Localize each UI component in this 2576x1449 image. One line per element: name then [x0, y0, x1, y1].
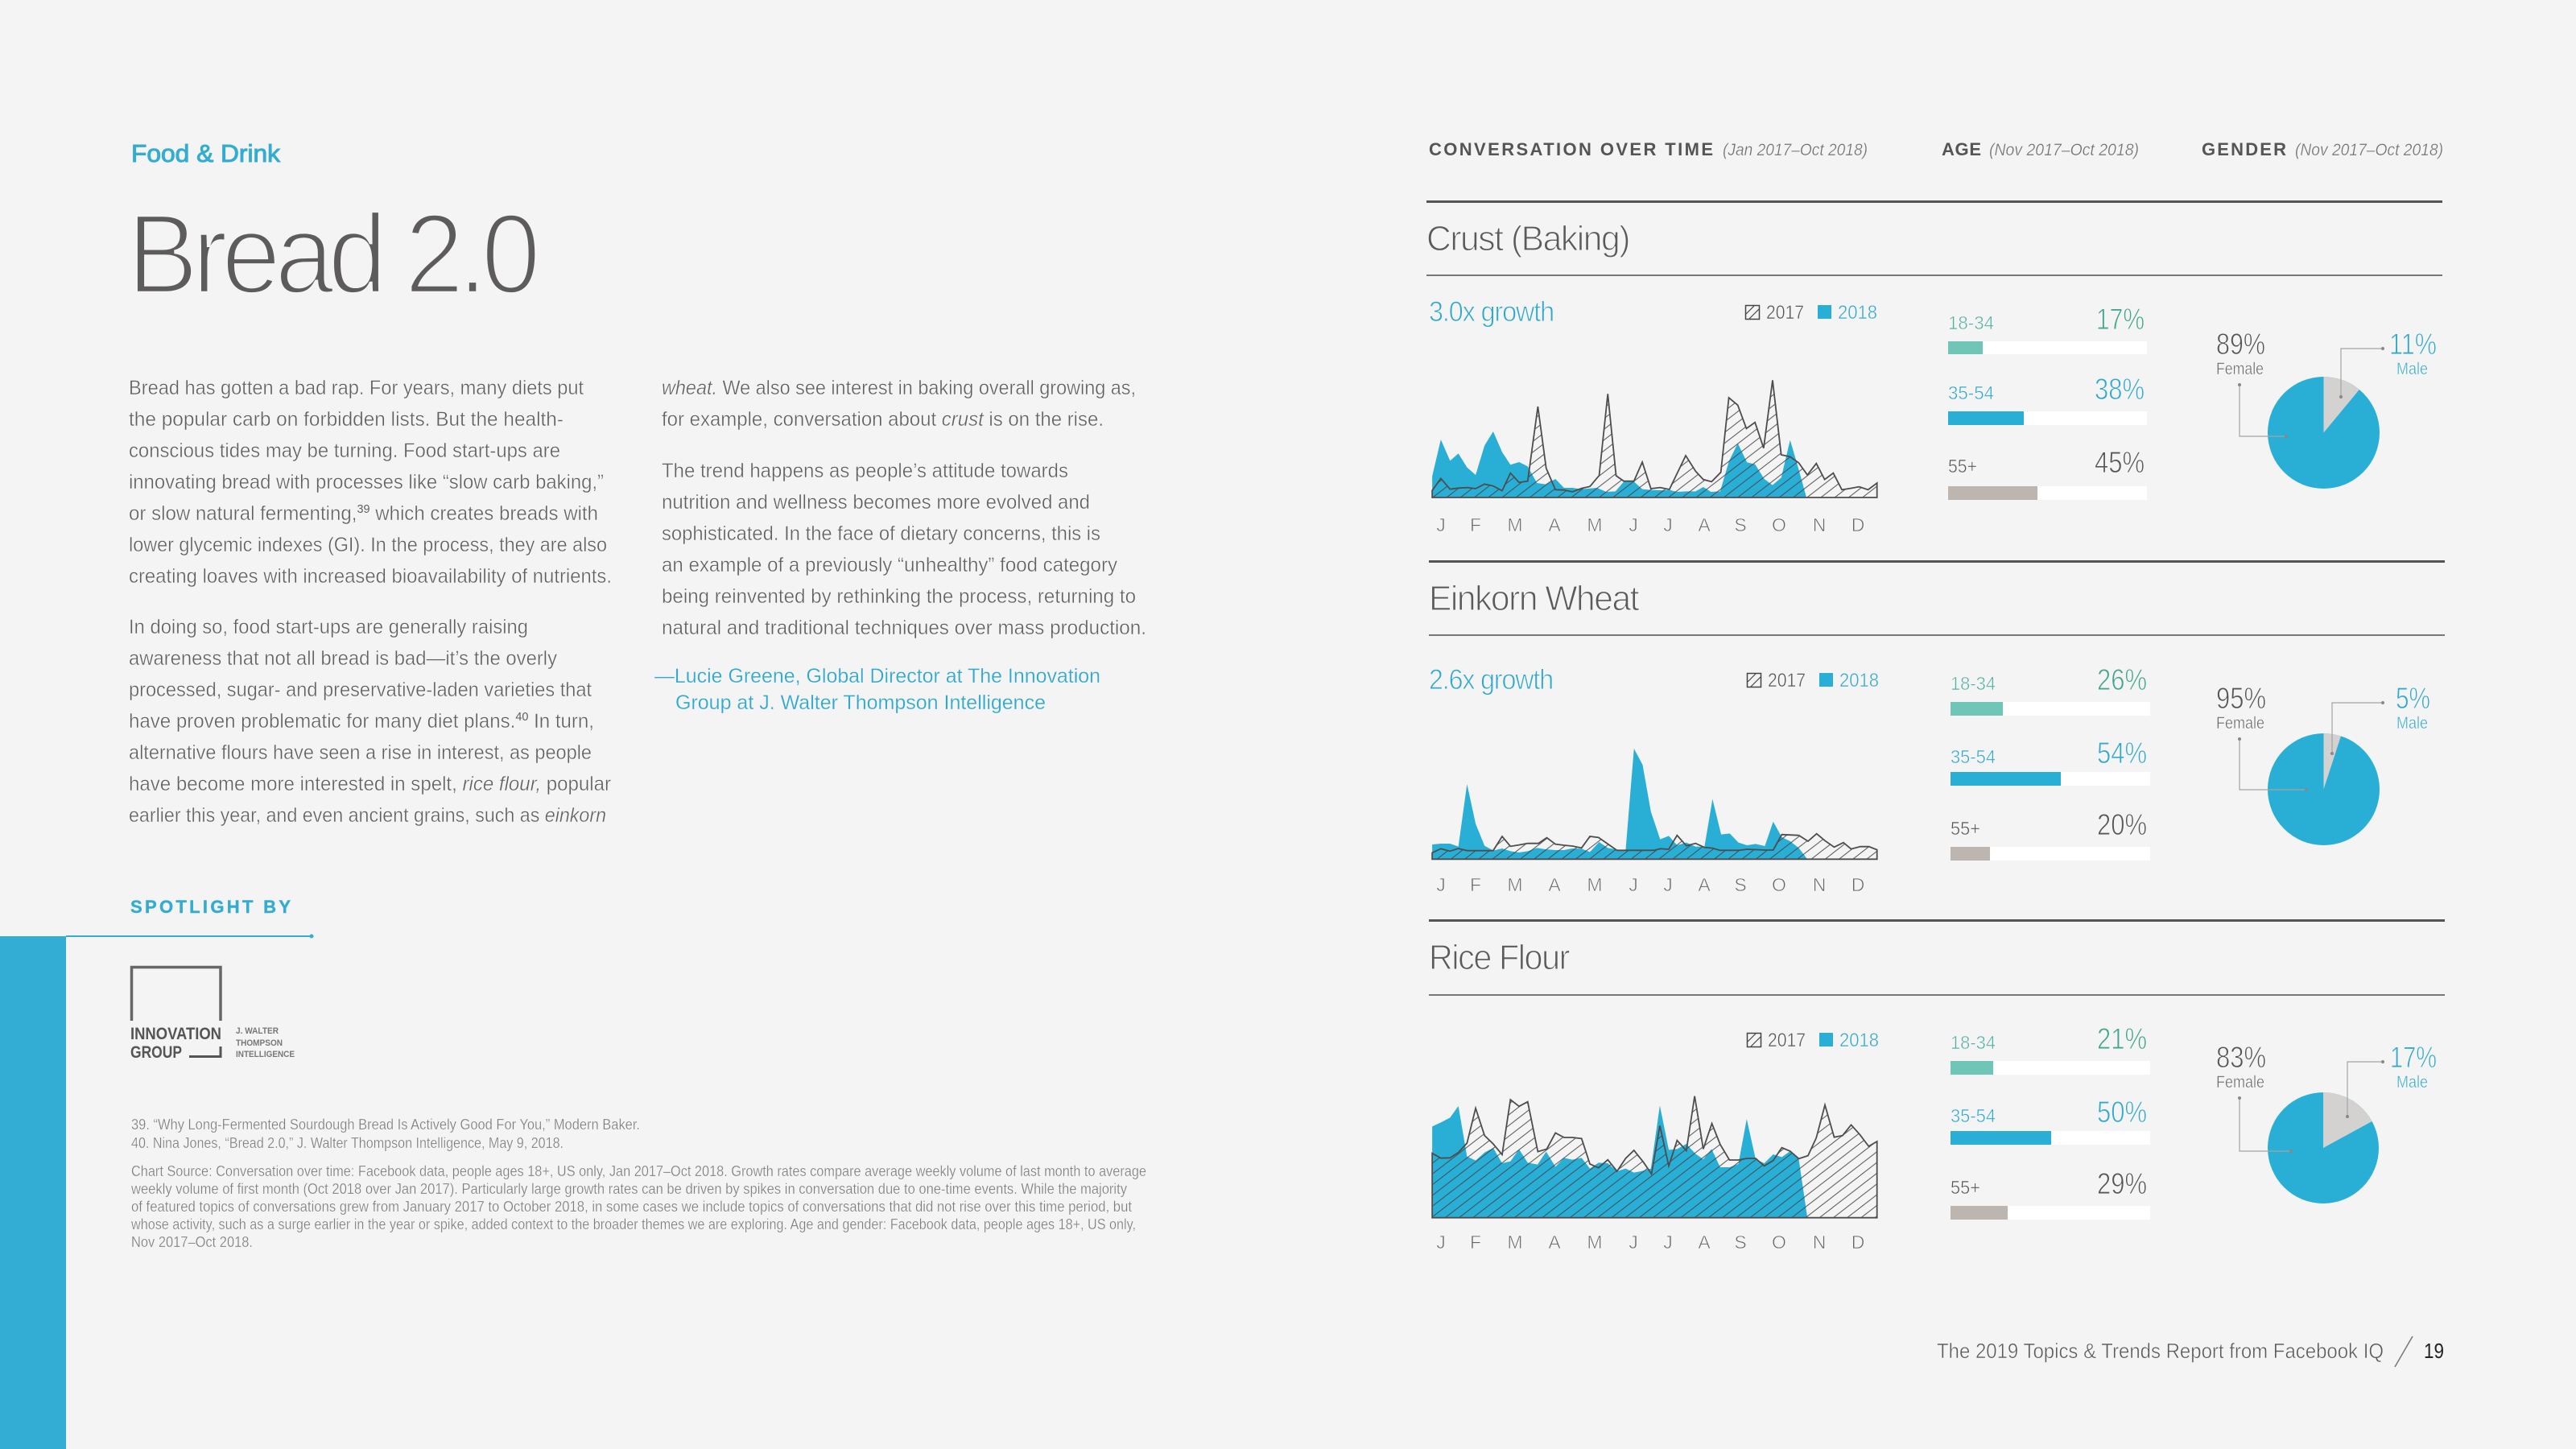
month axis: A	[1698, 514, 1711, 535]
heading: Einkorn Wheat	[1429, 579, 1639, 618]
gender pie: Male	[2396, 360, 2428, 378]
chart source note: Nov 2017–Oct 2018.	[131, 1234, 253, 1250]
gender pie	[2216, 1041, 2437, 1203]
month axis: D	[1852, 1232, 1864, 1253]
age bars: 18-34	[1951, 1032, 1996, 1053]
panel: Crust (Baking)	[1426, 200, 2442, 535]
month axis: O	[1772, 514, 1786, 535]
body text column 1: 39	[357, 502, 370, 516]
month axis: F	[1470, 514, 1481, 535]
legend: 2017	[1768, 1030, 1806, 1051]
body text column 1: the popular carb on forbidden lists. But the health-	[129, 408, 564, 431]
month axis	[1436, 1232, 1864, 1253]
column headers: (Nov 2017–Oct 2018)	[1989, 141, 2139, 159]
body text column 1	[129, 377, 612, 827]
month axis: J	[1663, 514, 1673, 535]
month axis: F	[1470, 874, 1481, 895]
month axis	[1436, 874, 1864, 895]
month axis: J	[1436, 874, 1446, 895]
logo: Innovation Group: THOMPSON	[236, 1038, 283, 1048]
age bars: 50%	[2097, 1096, 2147, 1129]
body text column 1: have become more interested in spelt, rice flour, popular	[129, 773, 611, 795]
body text column 2: nutrition and wellness becomes more evolved and	[662, 491, 1090, 514]
gender pie: 17%	[2390, 1041, 2437, 1074]
body text column 1: creating loaves with increased bioavailability of nutrients.	[129, 565, 612, 588]
gender pie: Female	[2216, 714, 2264, 733]
logo: Innovation Group: INNOVATION	[130, 1025, 221, 1043]
age bars: 55+	[1948, 456, 1977, 477]
gender pie: 83%	[2216, 1041, 2266, 1074]
legend: 2018	[1838, 302, 1877, 324]
age bars: 18-34	[1948, 312, 1994, 333]
month axis: A	[1698, 1232, 1711, 1253]
body text column 2: for example, conversation about crust is on the rise.	[662, 408, 1104, 431]
category label: Food & Drink	[131, 139, 281, 167]
month axis: N	[1813, 874, 1826, 895]
footnotes: 39. “Why Long-Fermented Sourdough Bread Is Actively Good For You,” Modern Baker.	[131, 1117, 640, 1133]
area chart	[1432, 749, 1877, 859]
footer: The 2019 Topics & Trends Report from Facebook IQ	[1937, 1339, 2384, 1363]
body text column 1: awareness that not all bread is bad—it’s the overly	[129, 647, 557, 670]
chart source note: whose activity, such as a surge earlier in the year or spike, added context to the broader themes we are exploring. Age and gender: Facebook data, people ages 18+, US only,	[130, 1216, 1136, 1232]
month axis: M	[1507, 1232, 1523, 1253]
body text column 1: innovating bread with processes like “slow carb baking,”	[129, 471, 604, 493]
growth label: 3.0x growth	[1429, 296, 1554, 328]
month axis: M	[1587, 874, 1603, 895]
age bars: 21%	[2097, 1022, 2147, 1055]
month axis: S	[1734, 514, 1747, 535]
legend: 2018	[1839, 1030, 1879, 1051]
gender pie: Female	[2216, 360, 2264, 378]
month axis: M	[1507, 514, 1523, 535]
month axis: A	[1548, 514, 1561, 535]
footnotes: 40. Nina Jones, “Bread 2.0,” J. Walter Thompson Intelligence, May 9, 2018.	[131, 1135, 564, 1151]
column headers: AGE	[1942, 139, 1981, 159]
logo: Innovation Group: INTELLIGENCE	[236, 1050, 295, 1059]
age bars: 45%	[2095, 446, 2145, 479]
body text column 1: have proven problematic for many diet plans.	[129, 710, 530, 733]
age bars: 29%	[2097, 1167, 2147, 1200]
body text column 2	[662, 377, 1146, 639]
area chart	[1432, 380, 1877, 497]
gender pie: 5%	[2396, 682, 2430, 715]
attribution quote: —Lucie Greene, Global Director at The Innovation	[654, 665, 1100, 687]
month axis: M	[1507, 874, 1523, 895]
gender pie: Female	[2216, 1073, 2264, 1092]
chart source note	[130, 1163, 1146, 1250]
area chart	[1432, 1096, 1877, 1218]
month axis: N	[1813, 1232, 1826, 1253]
spotlight rule with end dot	[66, 934, 314, 939]
age bars: 18-34	[1951, 673, 1996, 694]
attribution quote	[654, 665, 1100, 714]
legend	[1745, 302, 1877, 324]
heading: Crust (Baking)	[1426, 219, 1629, 258]
logo: Innovation Group: GROUP	[130, 1043, 182, 1062]
body text column 1: which creates breads with	[370, 502, 598, 525]
growth label: 2.6x growth	[1429, 664, 1553, 696]
legend: 2018	[1839, 670, 1879, 691]
body text column 2: natural and traditional techniques over mass production.	[662, 617, 1146, 639]
age bars: 55+	[1951, 818, 1980, 839]
column headers	[1429, 139, 2443, 159]
legend	[1747, 670, 1879, 691]
month axis: N	[1813, 514, 1826, 535]
body text column 1: alternative flours have seen a rise in interest, as people	[129, 741, 592, 764]
body text column 1: In doing so, food start-ups are generally raising	[129, 616, 528, 638]
body text column 2: wheat. We also see interest in baking overall growing as,	[662, 377, 1136, 399]
column headers: CONVERSATION OVER TIME	[1429, 139, 1713, 159]
body text column 1: or slow natural fermenting,	[129, 502, 366, 525]
footer: 19	[2424, 1339, 2444, 1363]
age bars: 26%	[2097, 663, 2147, 696]
logo: Innovation Group: J. WALTER	[236, 1026, 279, 1036]
body text column 1: In turn,	[528, 710, 594, 733]
spotlight heading: SPOTLIGHT BY	[130, 897, 291, 917]
age bars: 17%	[2096, 303, 2145, 336]
month axis: J	[1629, 514, 1638, 535]
age bars	[1951, 663, 2150, 861]
age bars: 38%	[2095, 373, 2145, 406]
gender pie: 11%	[2389, 328, 2437, 361]
month axis: D	[1852, 874, 1864, 895]
body text column 2: an example of a previously “unhealthy” food category	[662, 554, 1117, 576]
body text column 2: being reinvented by rethinking the process, returning to	[662, 585, 1136, 608]
legend	[1747, 1030, 1879, 1051]
month axis: M	[1587, 1232, 1603, 1253]
body text column 1: conscious tides may be turning. Food start-ups are	[129, 440, 560, 462]
month axis: O	[1772, 874, 1786, 895]
age bars	[1951, 1022, 2150, 1220]
chart source note: weekly volume of first month (Oct 2018 over Jan 2017). Particularly large growth rates can be driven by spikes in conversation due to one-time events. While the majority	[130, 1181, 1127, 1197]
body text column 1: 40	[515, 710, 528, 724]
chart source note: Chart Source: Conversation over time: Facebook data, people ages 18+, US only, Jan 2017–Oct 2018. Growth rates compare average weekly volume of last month to average	[131, 1163, 1146, 1179]
legend: 2017	[1768, 670, 1806, 691]
panel: Rice Flour	[1429, 919, 2445, 1253]
logo: Innovation Group	[130, 968, 295, 1062]
gender pie: Male	[2396, 714, 2428, 733]
gender pie: 89%	[2216, 328, 2265, 361]
gender pie	[2216, 328, 2437, 489]
age bars: 55+	[1951, 1177, 1980, 1198]
footnotes	[131, 1117, 640, 1151]
month axis: S	[1734, 1232, 1747, 1253]
body text column 2: The trend happens as people’s attitude towards	[662, 460, 1068, 482]
month axis: J	[1663, 1232, 1673, 1253]
month axis: A	[1698, 874, 1711, 895]
age bars	[1948, 303, 2147, 500]
month axis	[1436, 514, 1864, 535]
month axis: J	[1436, 1232, 1446, 1253]
body text column 1: Bread has gotten a bad rap. For years, many diets put	[129, 377, 584, 399]
body text column 2: sophisticated. In the face of dietary concerns, this is	[662, 522, 1100, 545]
month axis: M	[1587, 514, 1603, 535]
column headers: (Jan 2017–Oct 2018)	[1723, 141, 1868, 159]
body text column 1: earlier this year, and even ancient grains, such as einkorn	[129, 804, 606, 827]
month axis: O	[1772, 1232, 1786, 1253]
legend: 2017	[1766, 302, 1804, 324]
column headers: GENDER	[2202, 139, 2286, 159]
chart source note: of featured topics of conversations grew from January 2017 to October 2018, in some cases we include topics of conversations that did not rise over this time period, but	[131, 1199, 1132, 1215]
age bars: 35-54	[1948, 382, 1994, 403]
month axis: J	[1436, 514, 1446, 535]
age bars: 35-54	[1951, 1105, 1996, 1126]
month axis: A	[1548, 1232, 1561, 1253]
month axis: J	[1663, 874, 1673, 895]
title: Bread 2.0	[127, 190, 536, 317]
age bars: 35-54	[1951, 746, 1996, 767]
month axis: S	[1734, 874, 1747, 895]
age bars: 54%	[2097, 737, 2147, 770]
month axis: A	[1548, 874, 1561, 895]
age bars: 20%	[2097, 808, 2147, 841]
left accent bar	[0, 936, 66, 1449]
gender pie: Male	[2396, 1073, 2428, 1092]
gender pie: 95%	[2216, 682, 2266, 715]
body text column 1: lower glycemic indexes (GI). In the process, they are also	[129, 534, 607, 556]
panel: Einkorn Wheat	[1429, 560, 2445, 895]
column headers: (Nov 2017–Oct 2018)	[2295, 141, 2443, 159]
month axis: J	[1629, 874, 1638, 895]
gender pie	[2216, 682, 2430, 845]
month axis: D	[1852, 514, 1864, 535]
attribution quote: Group at J. Walter Thompson Intelligence	[675, 691, 1046, 714]
body text column 1: processed, sugar- and preservative-laden varieties that	[129, 679, 592, 701]
heading: Rice Flour	[1429, 938, 1570, 977]
month axis: J	[1629, 1232, 1638, 1253]
month axis: F	[1470, 1232, 1481, 1253]
